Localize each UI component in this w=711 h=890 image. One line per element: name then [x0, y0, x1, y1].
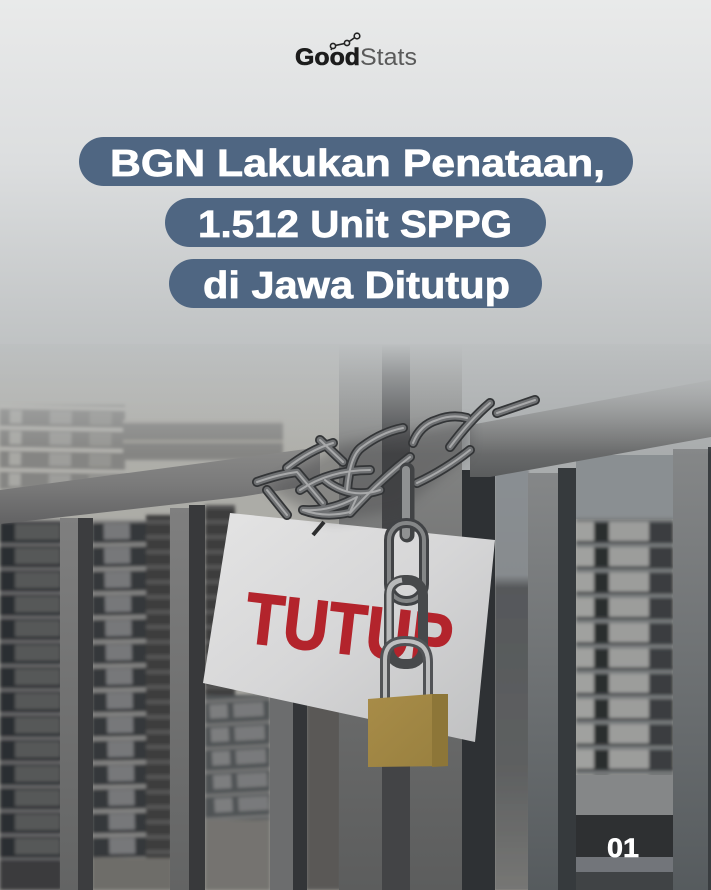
- left post 2: [170, 505, 205, 890]
- left post 1: [60, 518, 93, 890]
- photo: kitchen background: [0, 345, 711, 890]
- title pill 2: 1.512 Unit SPPG: [198, 204, 512, 246]
- top right rail: [470, 380, 711, 477]
- title pill 1: [79, 137, 633, 186]
- fade overlay into background: [0, 344, 711, 454]
- title pill 3: di Jawa Ditutup: [203, 265, 510, 307]
- vertical chain: [385, 470, 428, 700]
- fence bars and posts: [0, 345, 711, 890]
- sign text: TUTUP: [241, 578, 457, 681]
- chain shadow mass: [265, 420, 470, 522]
- logo wordmark: Good: [295, 44, 360, 71]
- title pill 3: [169, 259, 542, 308]
- padlock shackle: [385, 641, 428, 700]
- right post 1: [528, 468, 576, 890]
- right panel behind bars: [495, 470, 529, 890]
- padlock body: [368, 694, 448, 767]
- center main posts: [339, 345, 495, 890]
- right tray stack: [576, 455, 674, 519]
- logo wordmark stats: Stats: [360, 44, 417, 71]
- title pill 1: BGN Lakukan Penataan,: [110, 143, 605, 185]
- chain cluster: [257, 400, 535, 515]
- logo line icon: [330, 33, 360, 50]
- top left rail: [0, 447, 320, 524]
- sign board: [203, 513, 495, 742]
- blurred tray stacks: [0, 405, 342, 890]
- page number: 01: [607, 833, 639, 863]
- chain link 2: [389, 580, 423, 664]
- right post 2: [673, 447, 711, 890]
- chain link 1: [389, 523, 424, 601]
- wall on the right: [462, 345, 711, 485]
- chain link top bar: [406, 470, 407, 535]
- title pill 2: [165, 198, 546, 247]
- center post short: [270, 695, 307, 890]
- logo: [295, 33, 417, 71]
- sign pin: [313, 522, 324, 535]
